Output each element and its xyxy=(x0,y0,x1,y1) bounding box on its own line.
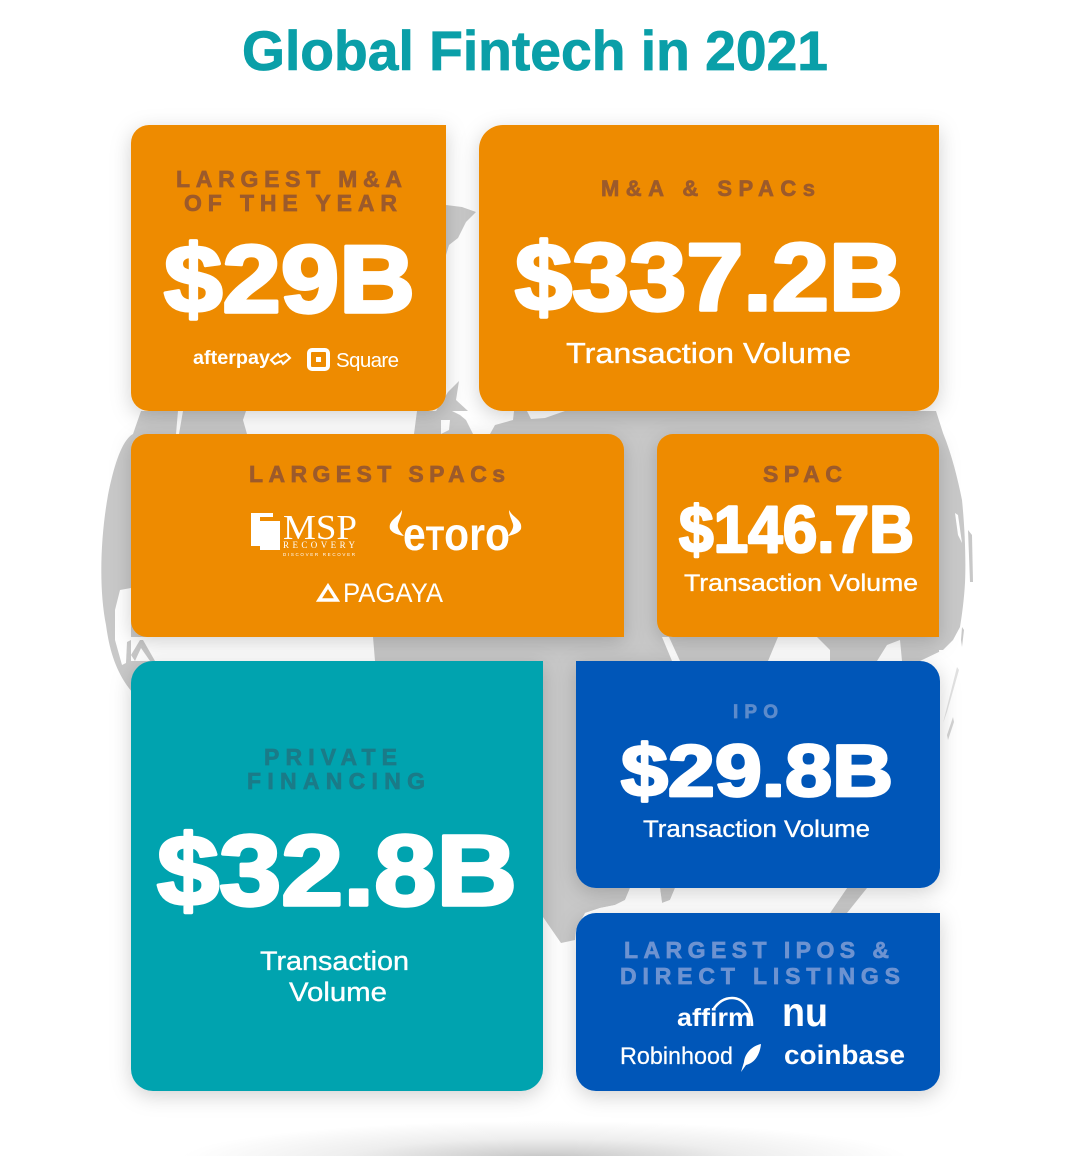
logo: MSP Recovery xyxy=(251,508,357,557)
heading: M&A & SPACs xyxy=(601,176,815,201)
panel: private financing xyxy=(131,661,543,1091)
heading: of the year: OF THE YEAR xyxy=(184,190,397,216)
caption: Transaction Volume xyxy=(643,816,870,843)
heading: private: PRIVATE xyxy=(264,744,397,770)
value: $32.8B: $32.8B xyxy=(157,815,517,927)
value: $29.8B: $29.8B xyxy=(621,731,893,812)
caption: Volume xyxy=(289,977,387,1007)
value: $146.7B: $146.7B xyxy=(679,492,914,566)
panel: SPAC xyxy=(657,434,939,637)
logo: Robinhood: Robinhood xyxy=(620,1043,733,1070)
globe fragments beneath the middle row xyxy=(131,640,155,661)
logo: affirm: affirm xyxy=(677,1004,752,1032)
heading: largest M&A: LARGEST M&A xyxy=(176,166,402,192)
logo: afterpay: afterpay xyxy=(193,348,270,369)
heading: LARGEST SPACs xyxy=(249,461,505,487)
title: Global Fintech in 2021 xyxy=(242,19,828,82)
heading line 2: DIRECT LISTINGS xyxy=(620,963,900,989)
caption: Transaction Volume xyxy=(684,570,918,597)
logo: MSP Recovery: RECOVERY xyxy=(283,540,356,550)
panel: IPO xyxy=(576,661,940,888)
panel: largest M&A of the year xyxy=(131,125,446,411)
caption: Transaction Volume xyxy=(566,338,851,370)
logo: eToro: eToro xyxy=(403,508,510,560)
caption xyxy=(260,946,409,1007)
white land cut-outs in the globe xyxy=(115,411,962,913)
caption: Transaction xyxy=(260,946,409,976)
logo: Nu: nu xyxy=(782,989,828,1035)
logo: Square: Square xyxy=(336,349,399,372)
logo: MSP Recovery: DISCOVER RECOVER xyxy=(283,552,356,557)
floor shadow under the globe xyxy=(180,1121,910,1156)
heading: SPAC xyxy=(763,461,842,487)
value: $337.2B: $337.2B xyxy=(515,224,903,331)
panel: M&A and SPACs xyxy=(479,125,939,411)
heading: financing: FINANCING xyxy=(247,768,425,794)
logo: Coinbase: coinbase xyxy=(784,1040,905,1070)
heading line 1: LARGEST IPOS & xyxy=(624,937,889,963)
heading: IPO xyxy=(733,702,778,723)
panel: largest SPACs xyxy=(131,434,624,637)
logo: MSP Recovery: MSP xyxy=(283,508,357,547)
panel: largest IPOs and direct listings xyxy=(576,913,940,1091)
value: $29B: $29B xyxy=(164,226,415,333)
globe silhouette behind the cards xyxy=(101,205,973,943)
logo: Pagaya: PAGAYA xyxy=(343,578,443,608)
